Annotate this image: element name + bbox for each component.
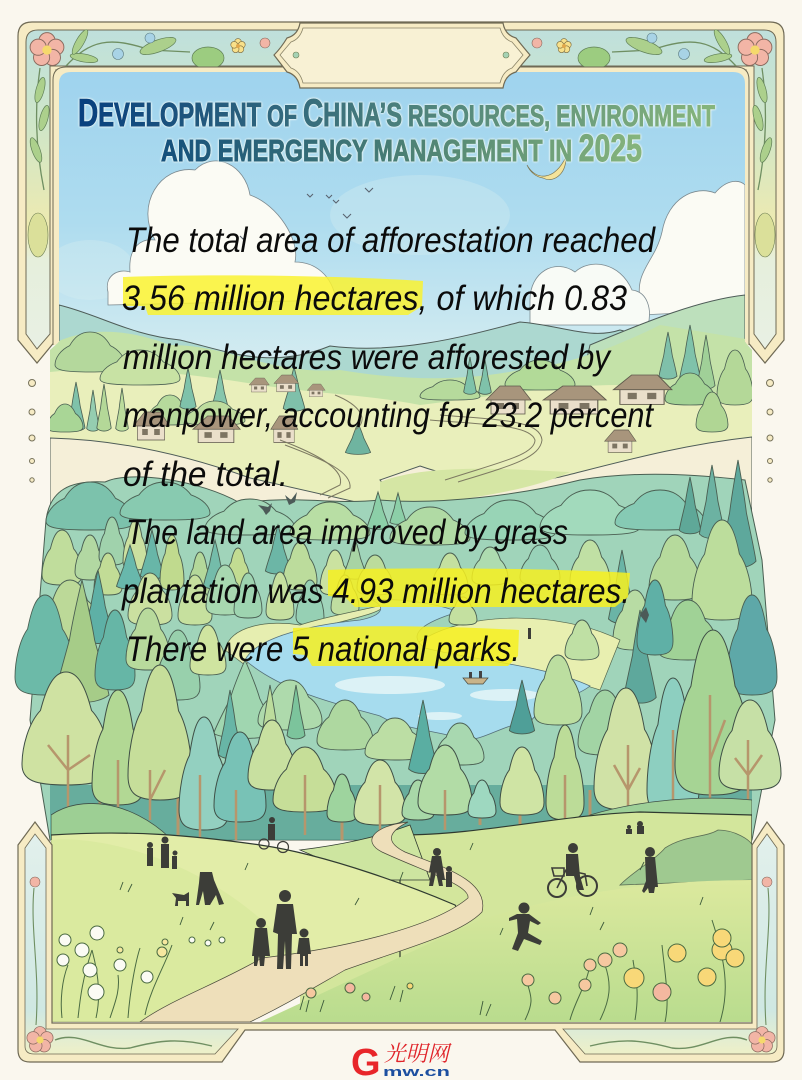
side column foliage left <box>28 213 48 257</box>
illustration: sky and valley <box>45 67 753 530</box>
icon: bottom left flower <box>27 1027 53 1052</box>
title line 2: AND EMERGENCY MANAGEMENT IN 2025 <box>161 128 642 170</box>
side vines <box>33 888 769 1025</box>
pink buds <box>30 877 772 887</box>
small flower left <box>231 39 245 53</box>
silhouettes: walkers <box>147 817 658 969</box>
dense upper rows <box>42 517 610 600</box>
icon: corner flower right <box>738 33 772 66</box>
icon: bottom right flower <box>749 1027 775 1052</box>
watercolor sky patches <box>59 175 510 282</box>
bottom ornamental frame <box>18 822 784 1062</box>
lower mid tree row <box>317 580 777 774</box>
cloud: right large <box>639 181 745 315</box>
silhouette: walker right <box>642 847 658 893</box>
wildflowers left <box>57 926 225 1018</box>
left hill trees <box>47 332 371 454</box>
silhouette: family main <box>252 890 311 969</box>
silhouette: far cyclist <box>259 817 288 852</box>
paragraph: afforestation: The total area of afforestation reached <box>126 221 656 260</box>
logo: Guangming wang <box>351 1041 452 1080</box>
title <box>78 92 715 170</box>
shrub left <box>192 47 224 69</box>
back left grass <box>51 839 300 1022</box>
foreground valley: cream left <box>50 438 354 504</box>
silhouette: far family <box>147 836 178 869</box>
right hill <box>399 811 752 958</box>
cloud: left large <box>107 161 336 305</box>
illustration: forest and lake <box>15 380 781 840</box>
village houses <box>133 375 672 452</box>
trunks over crowns <box>48 695 762 840</box>
right bush <box>620 830 752 885</box>
illustration: meadow <box>51 798 752 1022</box>
front tree row <box>22 630 781 830</box>
second row trees <box>40 520 752 650</box>
meadow base <box>300 834 428 1004</box>
birds <box>240 188 373 243</box>
wildflowers right <box>306 920 744 1022</box>
silhouette: dog and person <box>172 872 224 906</box>
silhouette: running child <box>509 902 542 951</box>
far hills <box>58 304 624 378</box>
forest floor shade <box>50 785 752 840</box>
body text <box>121 221 656 669</box>
highlight: 3.56 million hectares <box>123 275 423 315</box>
lower right meadow <box>260 880 752 1022</box>
birds over forest <box>258 492 649 623</box>
forest base <box>30 474 775 840</box>
sky <box>50 72 752 372</box>
shrub right <box>578 47 610 69</box>
water highlights <box>335 676 540 720</box>
bell flowers <box>260 38 542 48</box>
paragraph: afforestation <box>122 221 656 494</box>
moon <box>527 157 566 180</box>
highlight: 4.93 million hectares <box>328 568 630 607</box>
paragraph: grass plantation <box>121 513 630 611</box>
small flower right <box>557 39 571 53</box>
grass tufts <box>120 843 703 1016</box>
left mid tree row <box>15 580 322 768</box>
left hill <box>51 833 458 1022</box>
leaves and tiny flowers <box>28 28 774 164</box>
middle hill <box>300 825 430 880</box>
paragraph: grass plantation: plantation was 4.93 million hectares. <box>121 572 630 611</box>
background trunks <box>100 780 590 840</box>
paragraph: national parks: There were 5 national parks. <box>126 630 520 669</box>
winding roads <box>280 395 542 498</box>
lake <box>245 600 590 739</box>
vine bottom left <box>55 1037 212 1048</box>
back ridge trees <box>46 460 756 579</box>
top ornamental frame <box>18 22 784 363</box>
right hill trees <box>420 325 753 432</box>
vine bottom right <box>590 1037 747 1048</box>
dots: left and right ornamental beads <box>28 380 774 482</box>
paragraph: grass plantation: The land area improved by grass <box>126 513 568 552</box>
band right <box>563 834 777 1054</box>
logo Chinese name: 光明网 <box>384 1041 452 1066</box>
foreground valley: green <box>380 468 570 501</box>
path <box>140 822 483 1022</box>
silhouette: adult and child <box>429 848 452 887</box>
side column foliage right <box>755 213 775 257</box>
icon: corner flower left <box>30 33 64 66</box>
lake banks <box>225 604 620 690</box>
cloud: centre right <box>530 264 649 325</box>
logo domain: mw.cn <box>383 1064 450 1079</box>
paragraph: afforestation: 3.56 million hectares, of which 0.83 <box>122 279 627 318</box>
valley meadow <box>50 370 752 510</box>
vines top left <box>37 42 765 190</box>
band left <box>25 834 238 1054</box>
paragraph: afforestation: manpower, accounting for 23.2 percent <box>123 396 654 435</box>
foreground valley: cream right <box>379 436 752 510</box>
right mound <box>590 798 752 816</box>
paragraph: afforestation: of the total. <box>123 455 288 494</box>
paragraph: afforestation: million hectares were afforested by <box>123 338 612 377</box>
highlight: 5 national parks <box>293 626 519 666</box>
boat <box>463 671 488 684</box>
shore trees <box>449 597 599 734</box>
mid hills <box>50 325 752 405</box>
left mound <box>51 803 166 834</box>
silhouette: cyclist <box>548 843 597 897</box>
cartouche <box>274 23 530 88</box>
silhouette: far animals <box>626 821 644 834</box>
